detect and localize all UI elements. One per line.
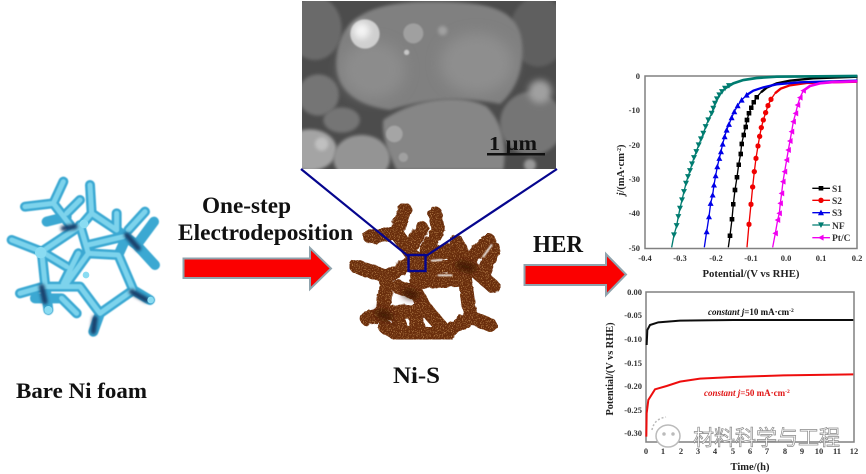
- x axis ticks: 0.0: [781, 253, 791, 263]
- y axis ticks: -10: [629, 105, 640, 115]
- x axis ticks: 0.1: [816, 253, 826, 263]
- x axis ticks: -0.2: [709, 253, 723, 263]
- arrow: HER: [524, 254, 626, 295]
- y axis ticks: 0: [636, 71, 640, 81]
- x axis ticks: -0.3: [673, 253, 687, 263]
- x axis ticks: 2: [679, 446, 683, 456]
- SEM micrograph: [302, 1, 556, 169]
- x axis ticks: 4: [713, 446, 718, 456]
- label: Ni-S: Ni-S: [393, 363, 440, 388]
- x axis ticks: 3: [696, 446, 700, 456]
- y axis ticks: -20: [629, 140, 640, 150]
- y axis title: Potential/(V vs RHE): [605, 322, 616, 416]
- y axis ticks: -50: [629, 243, 640, 253]
- x axis ticks: 11: [833, 446, 841, 456]
- y axis ticks: -0.15: [624, 358, 642, 368]
- curve label: 50 mA: -2: [785, 389, 790, 395]
- arrow: electrodeposition: [184, 248, 331, 289]
- step label: one-step electrodeposition: Electrodeposition: [178, 220, 353, 245]
- x axis ticks: [644, 446, 858, 456]
- scale bar: 1 µm: [489, 133, 537, 155]
- chart: stability curves: [605, 287, 858, 473]
- x axis ticks: 12: [850, 446, 858, 456]
- x axis ticks: 10: [815, 446, 823, 456]
- y axis ticks: -0.30: [624, 428, 642, 438]
- legend: NF: [832, 222, 845, 232]
- x axis ticks: 8: [783, 446, 787, 456]
- x axis ticks: -0.1: [744, 253, 758, 263]
- x axis ticks: -0.4: [638, 253, 652, 263]
- x axis title: Potential/(V vs RHE): [702, 269, 800, 280]
- legend: S3: [832, 209, 842, 219]
- x axis ticks: [638, 253, 862, 263]
- white gaps in foam: [432, 245, 492, 275]
- x axis ticks: 6: [748, 446, 752, 456]
- curves: [646, 320, 853, 437]
- x axis ticks: 9: [800, 446, 804, 456]
- label: HER: HER: [533, 232, 584, 258]
- zoom connector lines: [301, 169, 557, 256]
- curve label: 50 mA: constant j=50 mA·cm: [704, 388, 785, 398]
- y axis ticks: -0.05: [624, 310, 642, 320]
- x axis ticks: 0: [644, 446, 648, 456]
- legend: S1: [832, 185, 842, 195]
- scale bar: [487, 137, 545, 156]
- y axis ticks: 0.00: [627, 287, 642, 297]
- x axis ticks: 5: [731, 446, 735, 456]
- y axis ticks: -0.20: [624, 381, 642, 391]
- zoom marker square: [408, 255, 426, 271]
- y axis ticks: -30: [629, 174, 640, 184]
- legend: S2: [832, 197, 842, 207]
- y axis ticks: [629, 71, 640, 253]
- y axis ticks: -0.10: [624, 334, 642, 344]
- legend: Pt/C: [832, 234, 851, 244]
- x axis ticks: 7: [765, 446, 770, 456]
- curve label: 10 mA: -2: [789, 308, 794, 314]
- y axis ticks: [624, 287, 642, 438]
- legend: [812, 185, 851, 244]
- step label: one-step electrodeposition: One-step: [202, 193, 291, 218]
- y axis ticks: -0.25: [624, 405, 642, 415]
- curves: [672, 76, 857, 247]
- watermark: [652, 417, 840, 450]
- x axis ticks: 0.2: [852, 253, 862, 263]
- y axis title: -2: [617, 148, 623, 153]
- y axis title: j/(mA·cm: [616, 153, 627, 196]
- bare Ni foam illustration: [12, 182, 155, 332]
- plot frame: [645, 76, 857, 248]
- step label: one-step electrodeposition: [178, 193, 353, 245]
- title: bare Ni foam: Bare Ni foam: [16, 378, 147, 403]
- y axis title: ): [616, 144, 627, 148]
- x axis title: Time/(h): [731, 462, 770, 473]
- watermark text: 材料科学与工程: [693, 427, 840, 450]
- x axis ticks: 1: [661, 446, 665, 456]
- icon: chat bubbles: [652, 417, 680, 447]
- plot frame: [646, 292, 854, 442]
- chart: polarization curves: [616, 71, 862, 280]
- y axis ticks: -40: [629, 208, 640, 218]
- curve label: 10 mA: constant j=10 mA·cm: [708, 307, 789, 317]
- Ni-S foam illustration: [357, 210, 493, 333]
